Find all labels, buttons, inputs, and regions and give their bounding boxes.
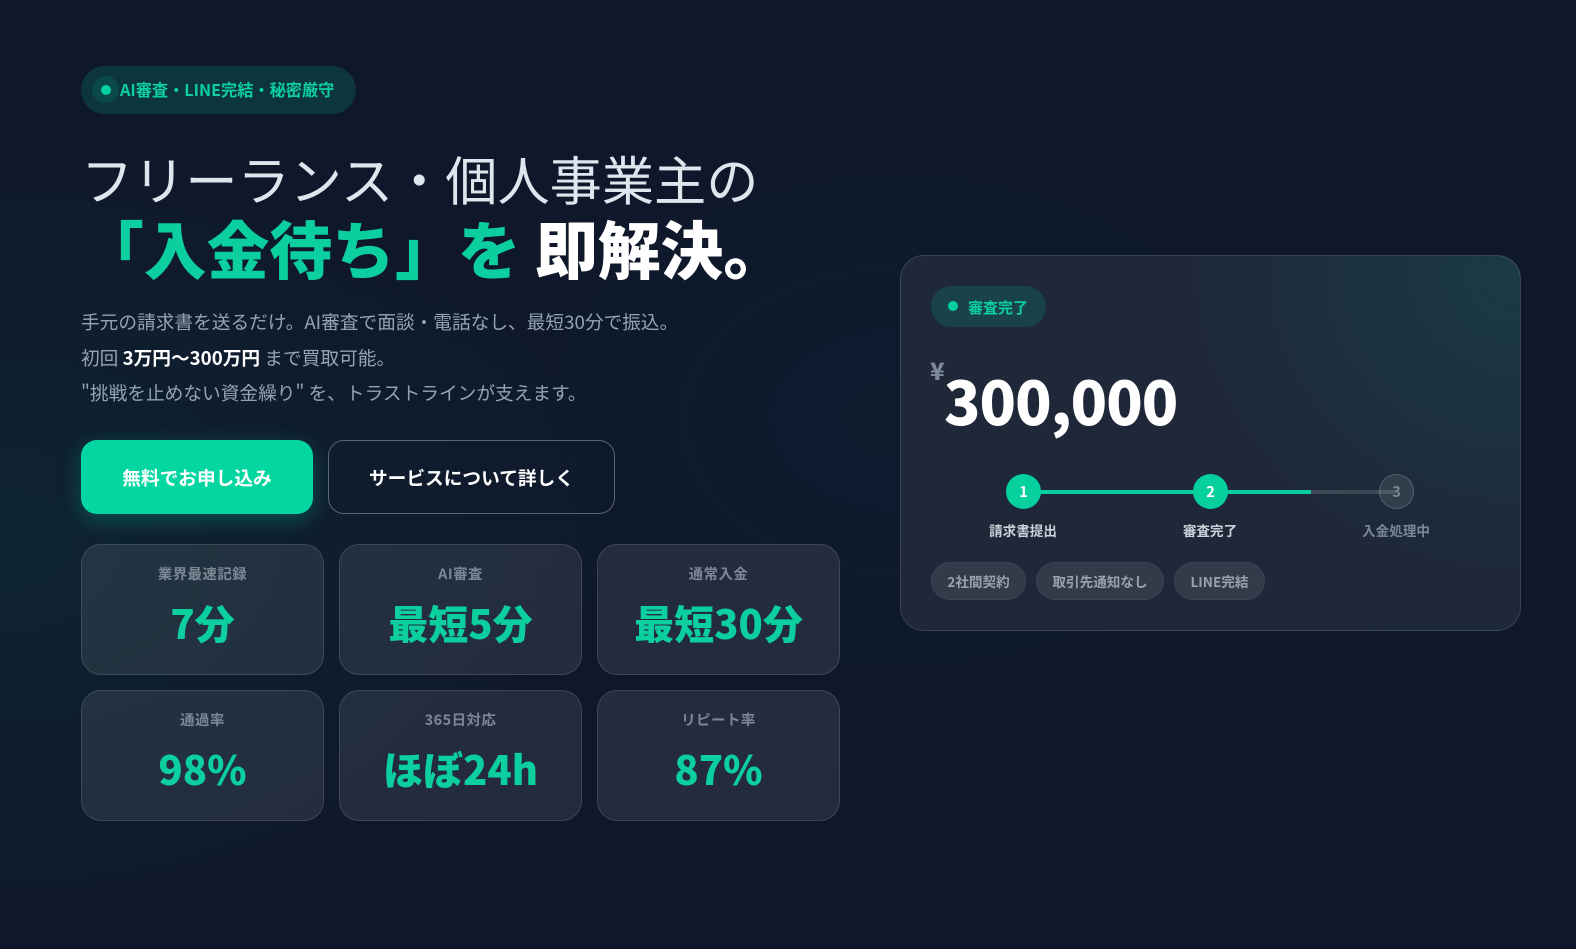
button: primary CTA [81, 440, 313, 514]
step 2 circle [1193, 474, 1228, 509]
stat: 通常入金: 通常入金 [689, 563, 748, 584]
lead text: 初回 3万円〜300万円 まで買取可能。 [81, 344, 395, 371]
status text: 審査完了 [968, 297, 1028, 318]
icon: status dot [948, 301, 958, 311]
badge: AI審査・LINE完結・秘密厳守 [81, 66, 356, 114]
stat: リピート率 [597, 690, 840, 821]
stat: AI審査: AI審査 [438, 563, 483, 584]
button: secondary: サービスについて詳しく [369, 464, 574, 491]
step 3 label: 入金処理中 [1362, 520, 1430, 540]
panel: review status card [900, 255, 1521, 631]
tag: 2社間契約 [931, 562, 1026, 600]
badge text: AI審査・LINE完結・秘密厳守 [120, 77, 334, 101]
step 2 label: 審査完了 [1183, 520, 1237, 540]
title line 1: フリーランス・個人事業主の [81, 140, 758, 216]
stat: 通常入金: 最短30分 [634, 593, 803, 651]
stat: 業界最速記録 [81, 544, 324, 675]
progress track [1023, 490, 1396, 494]
stat: 通過率: 通過率 [180, 709, 225, 730]
stat: 365日対応 [339, 690, 582, 821]
stat: 通常入金 [597, 544, 840, 675]
stat: 通過率: 98% [158, 739, 247, 797]
stats grid [81, 544, 840, 821]
title [81, 140, 786, 293]
tag: LINE完結 [1174, 562, 1265, 600]
step 1 label: 請求書提出 [989, 520, 1057, 540]
lead text: "挑戦を止めない資金繰り" を、トラストラインが支えます。 [81, 379, 587, 406]
step 1 circle [1006, 474, 1041, 509]
lead text [81, 308, 678, 406]
stat: 通過率 [81, 690, 324, 821]
step 3 circle: 3 [1392, 481, 1401, 502]
status badge [931, 286, 1046, 327]
button: primary CTA: 無料でお申し込み [122, 464, 272, 491]
button: secondary [328, 440, 615, 514]
stat: 365日対応: 365日対応 [425, 709, 496, 730]
tag: 取引先通知なし: 取引先通知なし [1052, 571, 1148, 591]
icon: pulsing dot [92, 76, 119, 103]
title line 2: 「入金待ち」を 即解決。 [81, 202, 786, 293]
amount value: 300,000 [944, 356, 1177, 443]
stat: AI審査: 最短5分 [388, 593, 533, 651]
stat: リピート率: リピート率 [681, 709, 756, 730]
tag: 2社間契約: 2社間契約 [947, 571, 1010, 591]
step 3 circle [1379, 474, 1414, 509]
step 1 circle: 1 [1019, 481, 1028, 502]
lead text: 手元の請求書を送るだけ。AI審査で面談・電話なし、最短30分で振込。 [81, 308, 678, 335]
stat: AI審査 [339, 544, 582, 675]
stat: 業界最速記録: 7分 [170, 593, 235, 651]
amount [930, 352, 1177, 443]
yen sign: ¥ [930, 352, 945, 387]
stat: リピート率: 87% [674, 739, 763, 797]
stat: 365日対応: ほぼ24h [383, 739, 538, 797]
stat: 業界最速記録: 業界最速記録 [158, 563, 247, 584]
tag: 取引先通知なし [1036, 562, 1164, 600]
step 2 circle: 2 [1206, 481, 1215, 502]
tag: LINE完結: LINE完結 [1190, 571, 1249, 591]
